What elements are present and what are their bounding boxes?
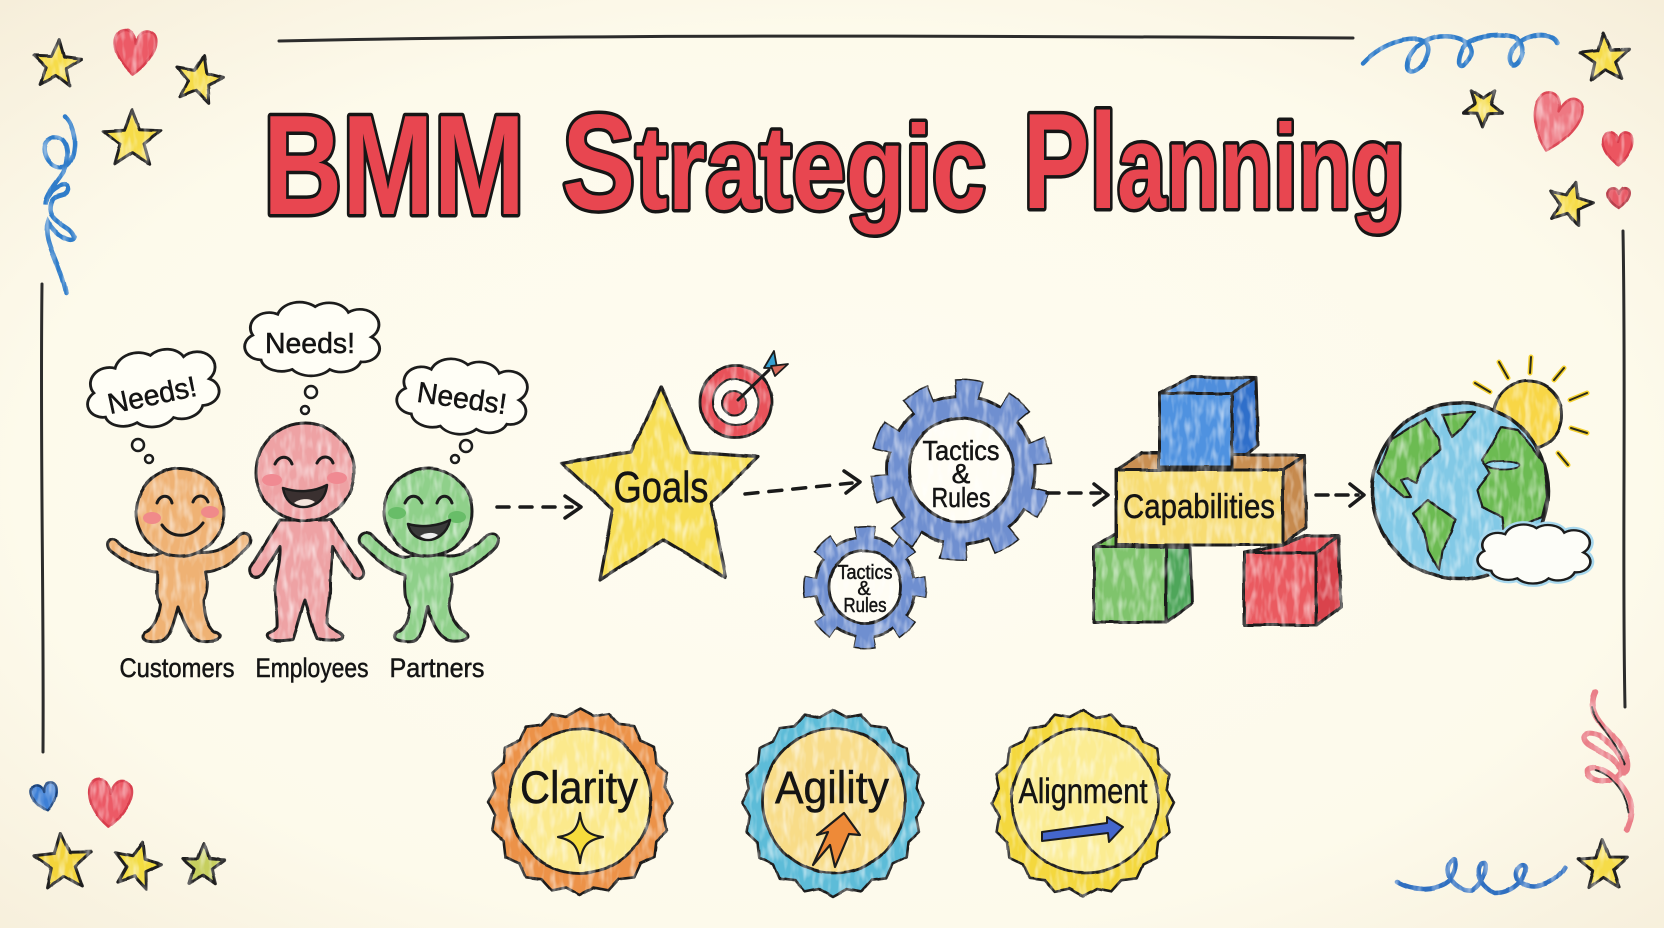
icon: red block — [1244, 536, 1341, 625]
badge: agility — [742, 710, 924, 896]
title: Strategic — [562, 86, 986, 238]
arrow: stakeholders to goals — [497, 496, 581, 518]
figure: employee — [250, 423, 368, 683]
thought bubble: partner needs: Needs! — [415, 377, 509, 421]
badge: agility: Agility — [775, 762, 889, 813]
icon: large gear: Rules — [932, 482, 990, 513]
badge: alignment: Alignment — [1018, 772, 1148, 811]
figure: employee: Employees — [256, 653, 368, 683]
capabilities block — [1116, 453, 1306, 545]
icon: target with dart — [700, 351, 788, 438]
title: Planning — [1023, 85, 1405, 237]
page frame lines — [41, 36, 1625, 752]
figure: customer: Customers — [120, 653, 234, 683]
icon: large gear: Tactics — [922, 435, 1000, 466]
panel: stakeholders — [81, 302, 530, 683]
icon: blue block — [1159, 377, 1258, 467]
title: BMM — [263, 86, 525, 245]
icon: large gear: & — [952, 458, 971, 489]
icon: sun — [1475, 357, 1587, 465]
decoration: bottom right doodles — [1397, 692, 1632, 893]
icon: earth — [1372, 403, 1548, 579]
figure: partner: Partners — [390, 653, 484, 683]
panel: capabilities blocks — [1094, 377, 1341, 625]
thought bubble: partner needs — [394, 354, 530, 463]
icon: small gear: Rules — [844, 595, 886, 617]
badge: alignment — [992, 710, 1174, 896]
icon: small gear — [800, 522, 930, 652]
icon: green block — [1094, 533, 1192, 622]
arrow: tactics to capabilities — [1047, 484, 1108, 505]
panel: value badges — [488, 709, 1174, 896]
decoration: bottom left doodles — [29, 778, 225, 891]
badge: clarity: Clarity — [520, 762, 638, 813]
thought bubble: employee needs — [245, 302, 380, 414]
icon: blue arrow — [1042, 817, 1123, 842]
arrow: goals to tactics — [745, 471, 860, 494]
capabilities block: Capabilities — [1123, 488, 1275, 526]
panel: tactics and rules — [800, 382, 1049, 652]
decoration: top right doodles — [1363, 31, 1632, 228]
icon: goals star: Goals — [614, 463, 708, 512]
icon: large gear — [873, 382, 1049, 558]
icon: orange arrow — [813, 813, 860, 867]
icon: goals star — [562, 387, 758, 580]
title — [263, 85, 1405, 245]
thought bubble: customer needs: Needs! — [105, 371, 200, 421]
thought bubble: customer needs — [81, 342, 223, 463]
panel: goals — [562, 351, 788, 580]
thought bubble: employee needs: Needs! — [265, 328, 355, 360]
icon: sparkle — [558, 813, 603, 863]
arrow: capabilities to world — [1316, 484, 1364, 506]
decoration: top left doodles — [32, 28, 227, 293]
icon: small gear: & — [857, 578, 871, 600]
icon: small gear: Tactics — [838, 562, 892, 584]
icon: cloud — [1478, 525, 1590, 583]
figure: customer — [108, 468, 251, 683]
figure: partner — [360, 468, 498, 683]
badge: clarity — [488, 709, 672, 895]
